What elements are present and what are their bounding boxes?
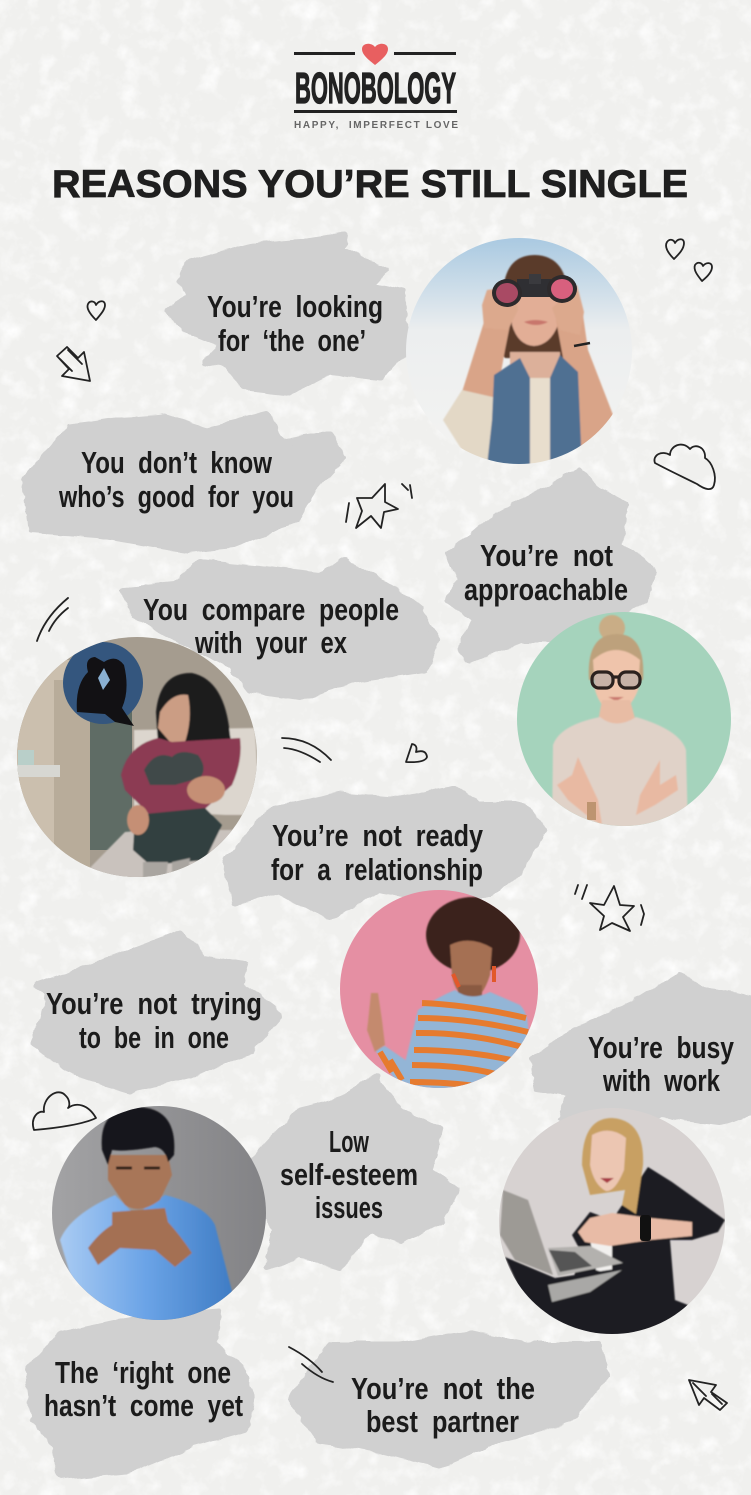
silver folder (548, 1270, 622, 1302)
knees (144, 752, 204, 785)
crossed arms (557, 757, 602, 825)
photo: man looking down (50, 1100, 270, 1325)
caption: who's good for you: who’s good for you (58, 479, 294, 514)
forearm (578, 1213, 692, 1246)
black folder (505, 1257, 628, 1340)
face (512, 295, 560, 346)
icon: heart doodle left (87, 301, 105, 320)
icon: curved lines centre (282, 738, 331, 762)
icon: cloud doodle right (654, 445, 715, 489)
caption: low self-esteem issues (280, 1124, 418, 1225)
icon: cloud doodle left (33, 1092, 96, 1130)
caption: not the best partner (351, 1371, 535, 1439)
caption: right one hasn't come yet: The ‘right one (55, 1355, 231, 1390)
afro (426, 897, 520, 973)
caption: looking for the one (207, 289, 383, 358)
caption: not ready for a relationship: for a relationship (271, 852, 483, 887)
hair (503, 254, 566, 360)
arms (462, 324, 510, 398)
hair (582, 1118, 643, 1214)
hands (187, 776, 225, 804)
logo (294, 44, 458, 131)
caption: who's good for you: You don’t know (81, 445, 273, 480)
logo: BONOBOLOGY (295, 64, 456, 113)
face (108, 1155, 172, 1209)
sweater (405, 990, 529, 1088)
photo: woman thinking of her ex (15, 635, 260, 880)
caption: right one hasn't come yet: hasn’t come yet (44, 1388, 243, 1423)
icon: arrow doodle right (689, 1380, 727, 1410)
hair and bun (599, 615, 625, 641)
face (590, 1131, 626, 1191)
logo: HAPPY, IMPERFECT LOVE (294, 120, 458, 131)
binoculars (492, 274, 577, 307)
caption: not approachable (464, 538, 628, 607)
caption: not trying to be in one (46, 986, 262, 1055)
caption: not trying to be in one: to be in one (79, 1020, 229, 1055)
caption: not approachable: approachable (464, 572, 628, 607)
icon: curved lines left (37, 598, 68, 641)
chest (510, 352, 560, 382)
blazer (560, 1167, 725, 1340)
hands (481, 288, 516, 327)
icon: small heart centre (406, 744, 427, 762)
caption: not ready for a relationship: You’re not ready (272, 818, 484, 853)
caption: who's good for you (58, 445, 294, 514)
caption: not trying to be in one: You’re not trying (46, 986, 262, 1021)
caption: looking for the one: for ‘the one’ (218, 323, 366, 358)
icon: heart doodles top right (666, 239, 712, 281)
shirt (60, 1195, 233, 1325)
hand (367, 993, 385, 1052)
icon: arrow doodle left (57, 347, 90, 381)
laptop (500, 1190, 553, 1275)
sweater (552, 717, 688, 830)
face (593, 650, 640, 711)
caption: not ready for a relationship (271, 818, 484, 887)
face (450, 941, 492, 1000)
caption: low self-esteem issues: Low (329, 1124, 370, 1159)
pillow (134, 728, 260, 815)
caption: compare people with ex (143, 592, 399, 660)
caption: right one hasn't come yet (44, 1355, 243, 1423)
caption: compare people with ex: with your ex (194, 625, 348, 660)
hair (102, 1107, 174, 1165)
neck (598, 699, 636, 724)
hair (155, 672, 232, 742)
caption: low self-esteem issues: issues (315, 1190, 383, 1225)
sweater (121, 738, 241, 815)
glasses (592, 672, 640, 688)
caption: busy with work: with work (602, 1063, 721, 1098)
bed (90, 829, 232, 877)
caption: not the best partner: You’re not the (351, 1371, 535, 1406)
photo: woman raising hand on pink (340, 890, 538, 1088)
caption: busy with work (588, 1030, 735, 1098)
blouse (590, 1242, 614, 1272)
face (158, 695, 190, 745)
thought bubble (63, 642, 143, 726)
caption: low self-esteem issues: self-esteem (280, 1157, 418, 1192)
vest (487, 358, 530, 466)
icon: heart (362, 44, 388, 65)
caption: compare people with ex: You compare people (143, 592, 399, 627)
caption: looking for the one: You’re looking (207, 289, 383, 324)
photo: woman with glasses on green (515, 610, 735, 830)
icon: star doodle centre (346, 484, 412, 528)
clasped hands (88, 1208, 192, 1267)
icon: star doodle right (575, 885, 644, 931)
neck (458, 984, 483, 997)
photo: businesswoman checking watch (499, 1117, 725, 1334)
legs (133, 808, 222, 865)
title: REASONS YOU’RE STILL SINGLE (52, 163, 688, 206)
photo: woman with binoculars (406, 238, 630, 464)
icon: curved lines bottom (289, 1347, 333, 1382)
caption: not approachable: You’re not (480, 538, 613, 573)
arm (376, 1046, 406, 1080)
caption: not the best partner: best partner (366, 1404, 519, 1439)
